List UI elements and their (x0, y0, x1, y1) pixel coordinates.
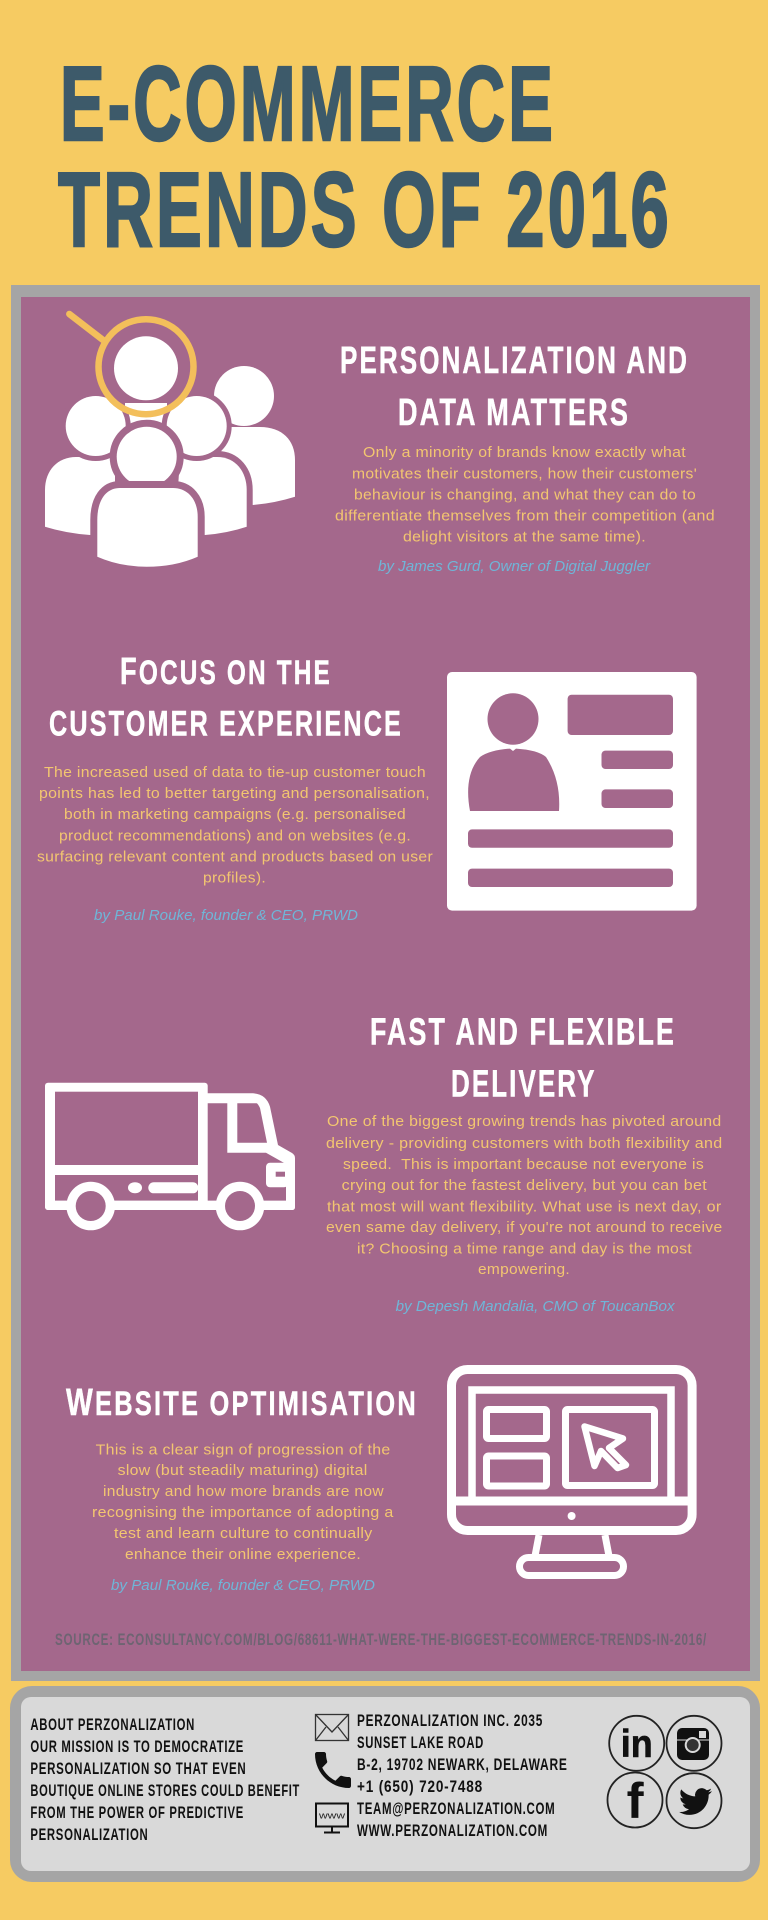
panel: footer (10, 1686, 760, 1882)
text block: contact: SUNSET LAKE ROAD (357, 1734, 484, 1752)
section: website optimisation (66, 1370, 692, 1594)
heading (370, 1012, 676, 1106)
text block: contact: TEAM@PERZONALIZATION.COM (357, 1800, 555, 1818)
icon: monitor with cursor (451, 1370, 692, 1576)
text block: industry and how more brands are now (103, 1483, 384, 1500)
icon: facebook: f (627, 1773, 644, 1829)
text block (92, 1441, 394, 1563)
text block: contact: WWW.PERZONALIZATION.COM (357, 1822, 548, 1840)
section: customer experience (37, 651, 697, 924)
text block: contact (357, 1712, 568, 1840)
text block: about (30, 1716, 300, 1844)
heading: WEBSITE OPTIMISATION (66, 1382, 418, 1424)
text block: product recommendations) and on websites (e.g. (59, 827, 411, 844)
icon: people with magnifier (45, 314, 295, 567)
text block: points has led to better targeting and personalisation, (39, 785, 430, 802)
text block: about: ABOUT PERZONALIZATION (30, 1716, 195, 1734)
icon: profile card (447, 672, 697, 911)
text block: contact: +1 (650) 720-7488 (357, 1778, 483, 1796)
text block: both in marketing campaigns (e.g. personalised (64, 806, 406, 823)
text block: about: FROM THE POWER OF PREDICTIVE (30, 1804, 244, 1822)
icon: twitter (666, 1773, 722, 1828)
byline: by Paul Rouke, founder & CEO, PRWD (94, 908, 358, 924)
icon: linkedin: in (621, 1723, 653, 1766)
icon: delivery truck (45, 1083, 295, 1230)
text block: test and learn culture to continually (114, 1525, 373, 1542)
heading: DATA MATTERS (398, 392, 630, 434)
text block: behaviour is changing, and what they can do to (354, 486, 696, 504)
icon: linkedin (609, 1716, 664, 1771)
text block: recognising the importance of adopting a (92, 1504, 394, 1521)
icon: envelope (316, 1714, 348, 1740)
text block: speed. This is important because not everyone is (343, 1156, 704, 1173)
text block (335, 444, 715, 546)
byline: by Depesh Mandalia, CMO of ToucanBox (396, 1299, 675, 1315)
text block: Only a minority of brands know exactly what (363, 444, 687, 461)
text block: delivery - providing customers with both flexibility and (326, 1135, 722, 1152)
icon: facebook (608, 1772, 662, 1829)
text block (326, 1113, 722, 1278)
section: personalization (45, 314, 715, 575)
byline: by Paul Rouke, founder & CEO, PRWD (111, 1578, 375, 1594)
section: delivery (45, 1012, 722, 1315)
icon: instagram (666, 1716, 722, 1771)
text block: differentiate themselves from their competition (and (335, 508, 715, 524)
heading: DELIVERY (451, 1064, 596, 1106)
text block: The increased used of data to tie-up customer touch (44, 764, 426, 781)
panel: trends (11, 285, 760, 1681)
text block: contact: PERZONALIZATION INC. 2035 (357, 1712, 543, 1730)
byline: by James Gurd, Owner of Digital Juggler (378, 559, 651, 575)
text block: delight visitors at the same time). (403, 528, 646, 546)
text block: empowering. (478, 1261, 570, 1278)
text block: about: PERSONALIZATION SO THAT EVEN (30, 1760, 246, 1778)
text block: about: OUR MISSION IS TO DEMOCRATIZE (30, 1738, 244, 1756)
icon: www monitor: www (318, 1810, 346, 1820)
icon: www monitor (316, 1804, 348, 1832)
text block: that most will want flexibility. What use is next day, or (327, 1198, 722, 1215)
heading: FOCUS ON THE (120, 651, 332, 693)
heading (340, 340, 689, 434)
heading (49, 651, 403, 744)
text block: contact: B-2, 19702 NEWARK, DELAWARE (357, 1756, 568, 1774)
text block: This is a clear sign of progression of the (96, 1441, 391, 1458)
text block: surfacing relevant content and products based on user (37, 849, 433, 866)
text block: crying out for the fastest delivery, but you can bet (342, 1177, 708, 1194)
text block: it? Choosing a time range and day is the most (357, 1240, 693, 1258)
text block: enhance their online experience. (125, 1546, 361, 1563)
text block: slow (but steadily maturing) digital (118, 1462, 368, 1479)
text block: about: PERSONALIZATION (30, 1826, 148, 1844)
text block (37, 764, 433, 886)
title (58, 45, 672, 269)
text block: even same day delivery, if you're not around to receive (326, 1219, 722, 1236)
text block: about: BOUTIQUE ONLINE STORES COULD BENEFIT (30, 1782, 300, 1800)
text block: profiles). (203, 869, 266, 886)
text block: motivates their customers, how their customers' (352, 466, 697, 482)
text block: One of the biggest growing trends has pivoted around (327, 1113, 722, 1130)
heading: CUSTOMER EXPERIENCE (49, 704, 403, 744)
icon: phone (315, 1752, 351, 1788)
